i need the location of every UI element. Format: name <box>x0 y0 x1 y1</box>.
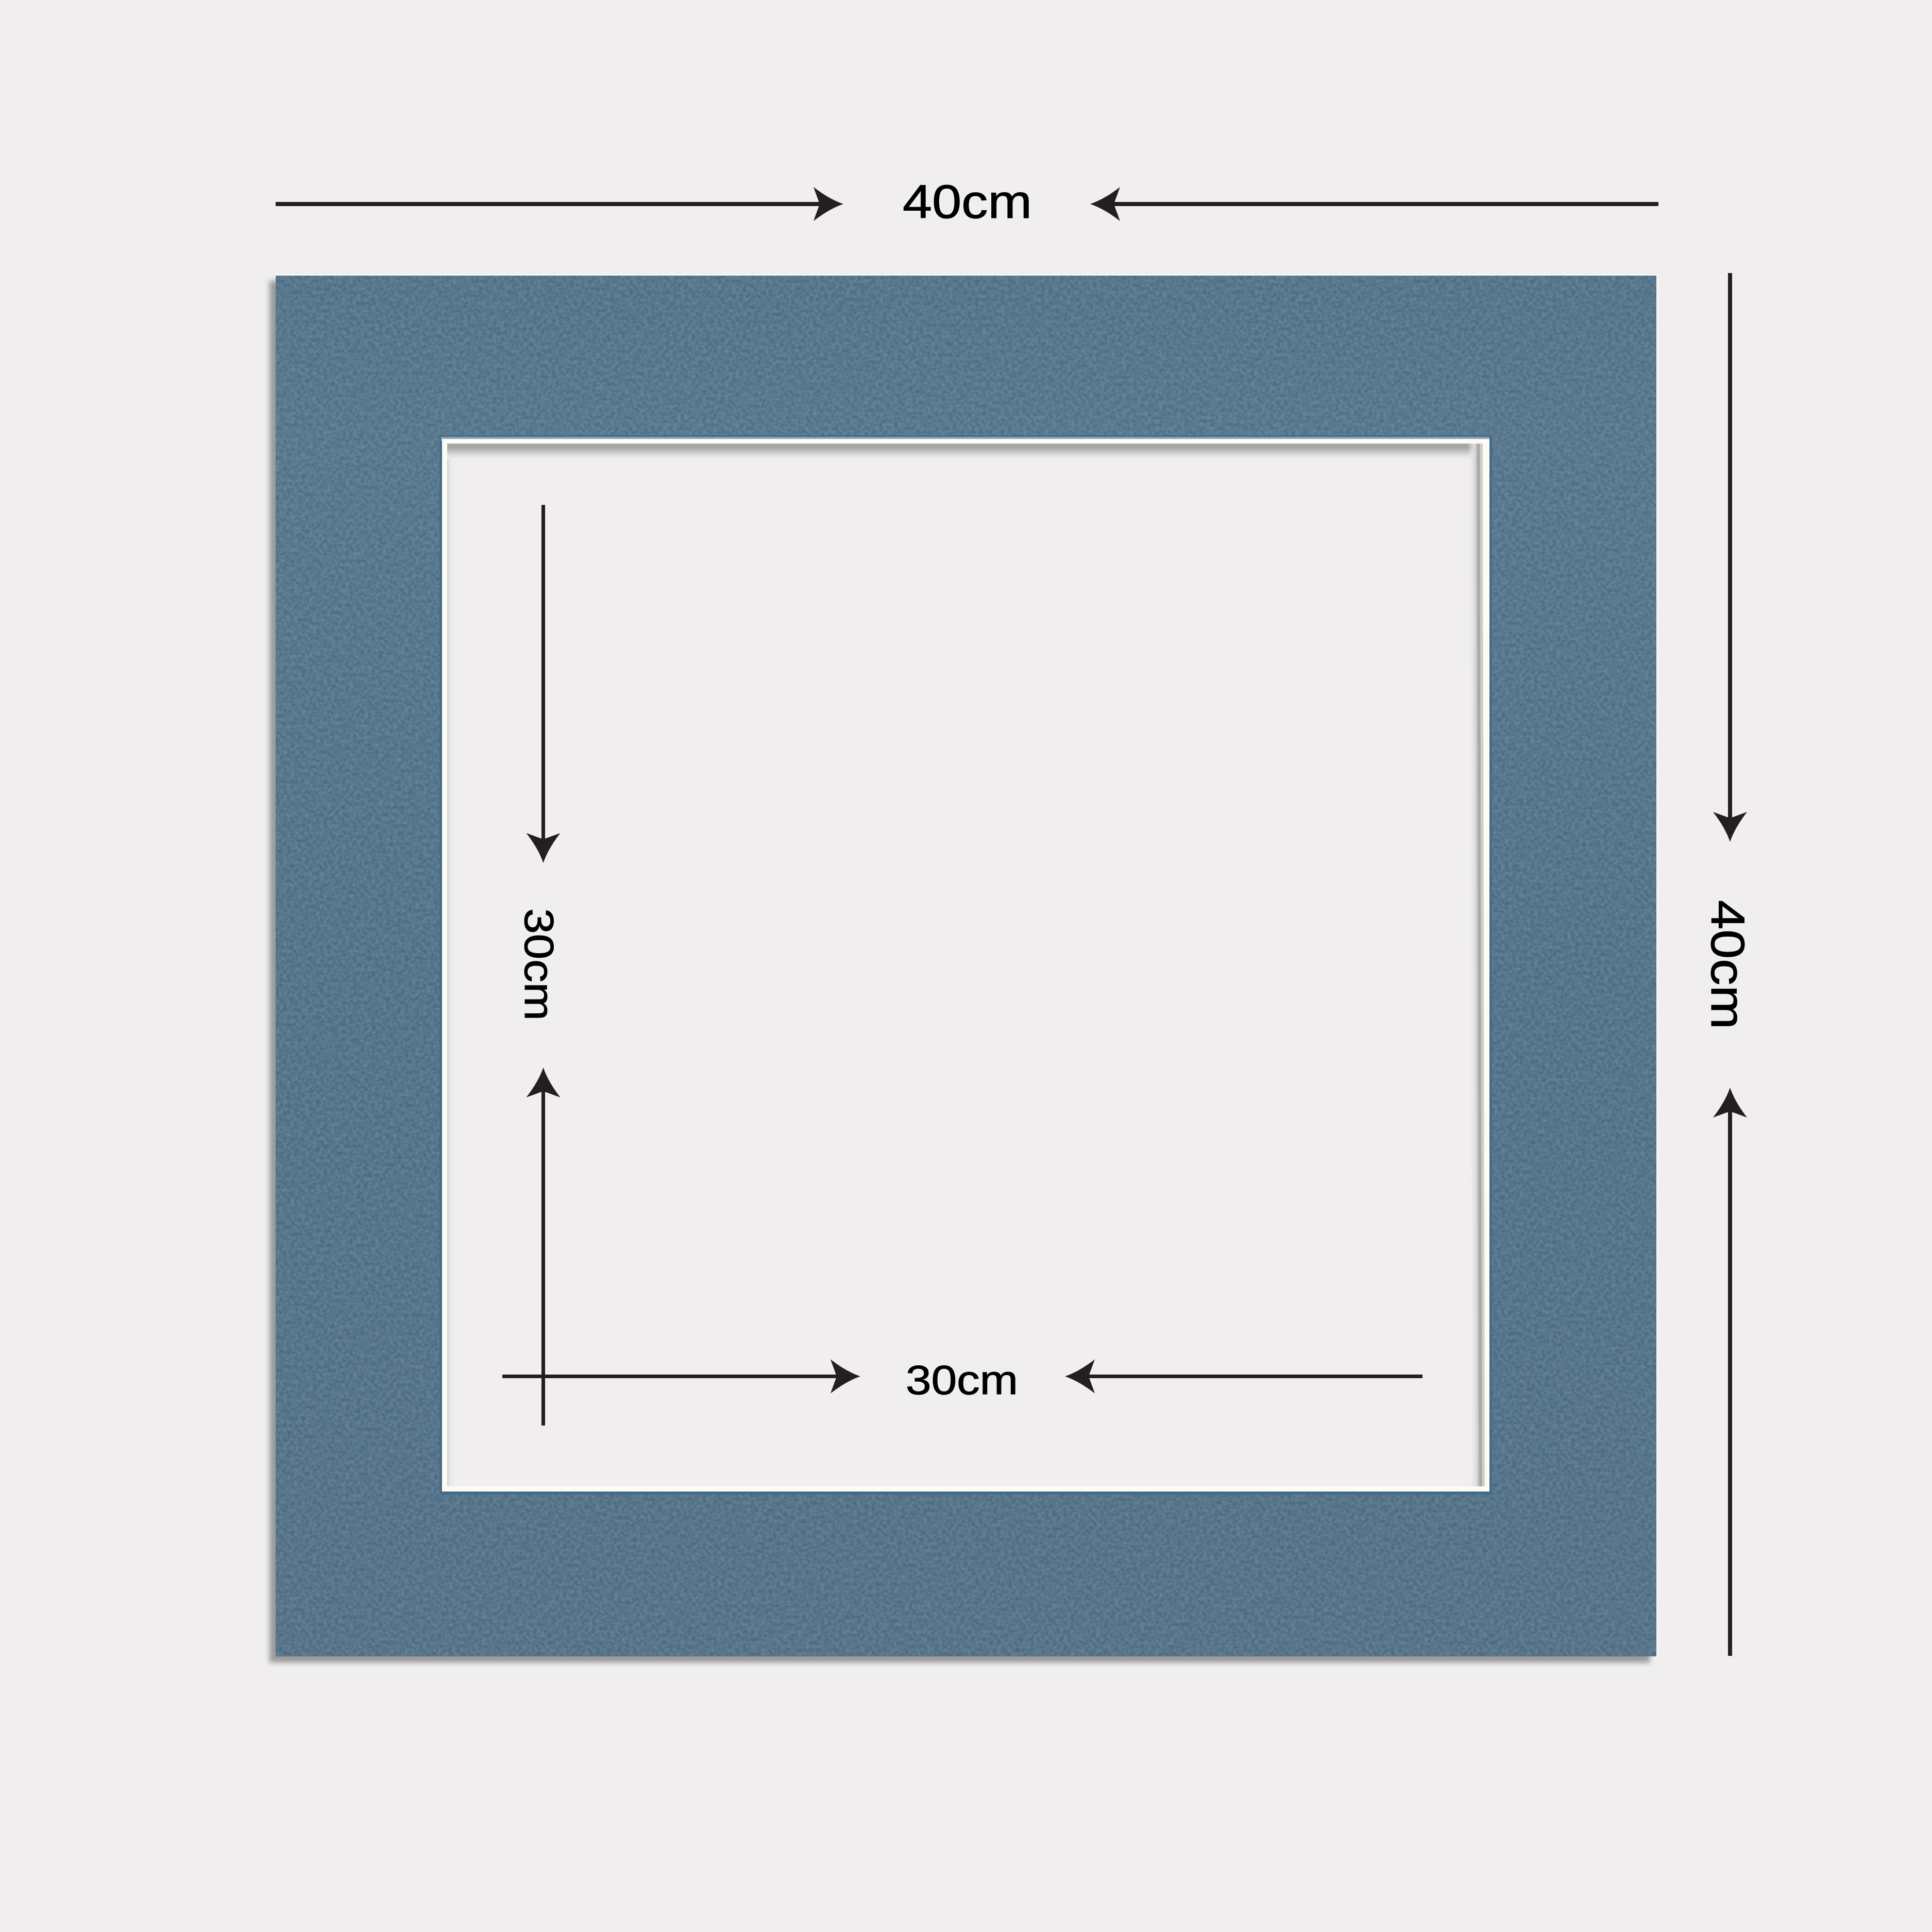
arrow: right outer, pointing up <box>1713 1088 1747 1656</box>
arrow: right outer, pointing down <box>1713 273 1747 842</box>
arrow: inner bottom, pointing left <box>1065 1359 1422 1393</box>
label: right 40cm: 40cm <box>1701 900 1754 1029</box>
arrow: inner left, pointing up <box>527 1067 561 1426</box>
label: inner left 30cm: 30cm <box>516 908 562 1021</box>
panel: window opening with cream bevel <box>442 439 1489 1492</box>
arrow: top outer, pointing right <box>276 187 843 221</box>
panel: blue mount board <box>269 274 1659 1663</box>
arrow: inner left, pointing down <box>527 505 561 863</box>
arrow: top outer, pointing left <box>1090 187 1658 221</box>
label: inner bottom 30cm: 30cm <box>906 1357 1018 1403</box>
label: top 40cm: 40cm <box>903 176 1032 228</box>
arrow: inner bottom, pointing right <box>502 1359 860 1393</box>
